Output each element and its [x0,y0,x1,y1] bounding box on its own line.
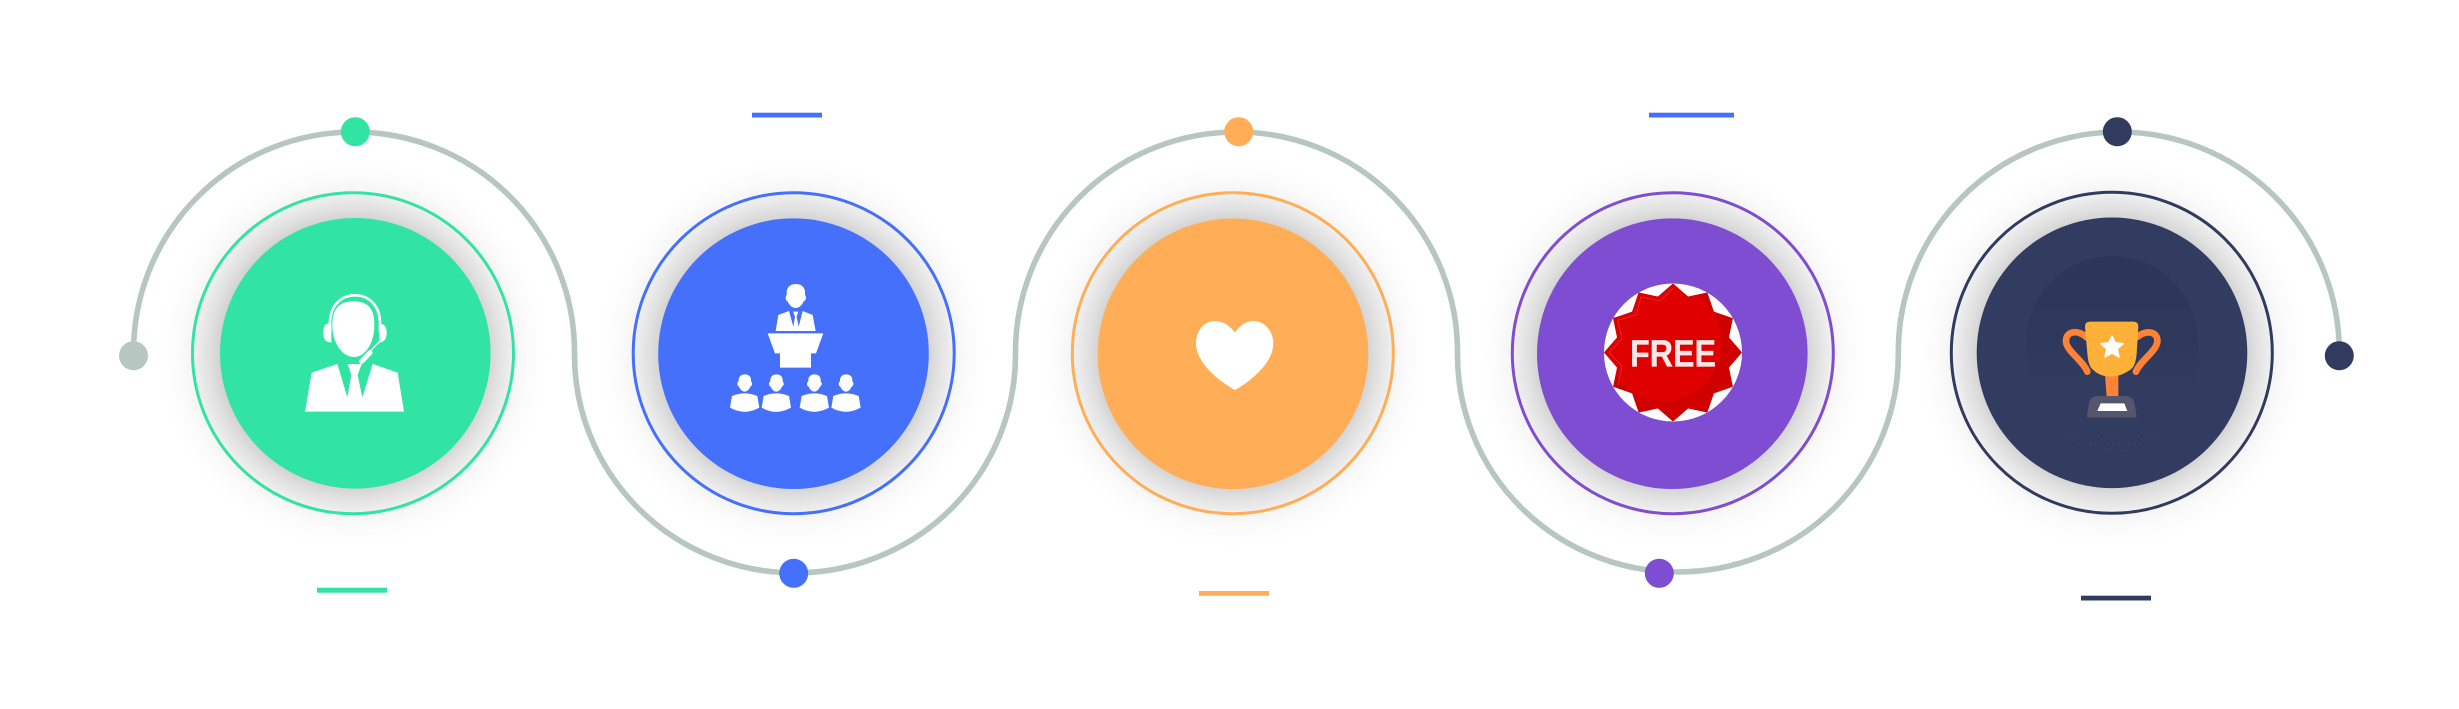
label bar 3 [1199,591,1269,596]
timeline dot 2 [779,559,808,588]
outer ring 1 [192,193,514,514]
outer ring 4 [1512,193,1833,514]
label bar 4 [1649,113,1734,118]
inner disc 3 [1098,218,1368,489]
timeline dot 1 [341,117,370,146]
inner disc 4 [1537,218,1808,489]
soft shadow 4 [1472,154,1872,554]
inner disc 2 [658,218,929,489]
timeline dot 3 [1224,117,1253,146]
timeline dot 5 [2103,117,2132,146]
step 2 panel: presentation [594,154,994,554]
inner disc 5 [1977,217,2247,488]
soft shadow 1 [154,153,554,553]
outer ring 2 [633,193,954,514]
step 4 panel: free badge [1506,187,1838,520]
step 1 panel: customer support [154,153,554,553]
label bar 5 [2081,596,2151,600]
end dot [2325,341,2354,370]
timeline dot 4 [1645,559,1674,588]
step 5 panel: trophy [1912,153,2312,553]
soft shadow 2 [594,154,994,554]
label bar 2 [752,113,822,118]
label bar 1 [317,588,387,593]
icon: speaker at podium with audience [730,284,861,412]
start dot [119,341,148,370]
outer ring 5 [1951,192,2272,513]
outer ring 3 [1072,193,1393,514]
icon: heart [1196,321,1273,390]
icon: agent with headset [305,295,404,412]
icon: trophy [2027,256,2198,450]
step 3 panel: heart [1033,154,1433,554]
soft shadow 5 [1912,153,2312,553]
inner disc 1 [220,218,491,489]
icon: FREE badge: FREE [1630,334,1716,376]
connector: winding timeline path [134,132,2339,573]
soft shadow 3 [1033,154,1433,554]
icon: FREE badge [1598,283,1742,422]
infographic canvas [119,112,2354,600]
